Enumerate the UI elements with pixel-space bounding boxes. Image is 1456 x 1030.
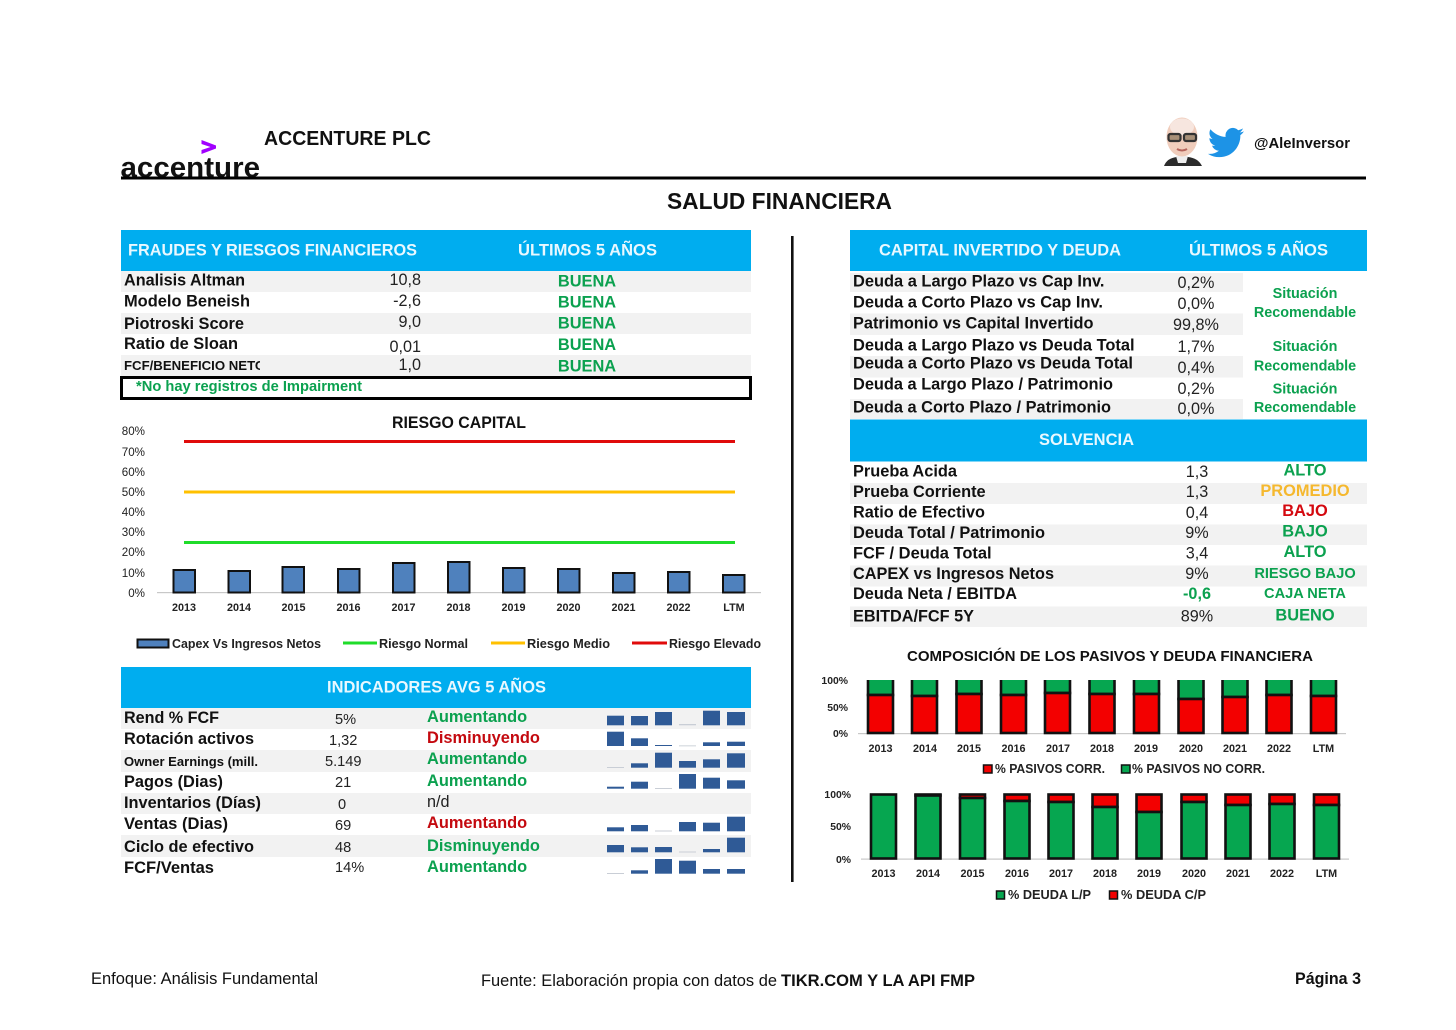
chart title: RIESGO CAPITAL xyxy=(392,413,526,432)
x axis: 2021 xyxy=(611,602,636,614)
legend: % PASIVOS CORR. xyxy=(995,761,1105,776)
x axis: 2022 xyxy=(666,602,691,614)
legend xyxy=(996,887,1206,902)
y axis xyxy=(122,425,145,600)
panel: solvencia: FCF / Deuda Total xyxy=(853,544,992,562)
panel: capital invertido y deuda: Deuda a Corto Plazo vs Cap Inv. xyxy=(853,294,1103,312)
panel: indicadores avg 5 anos: 1,32 xyxy=(329,733,357,749)
panel: capital invertido y deuda: Recomendable xyxy=(1254,358,1356,374)
panel: capital invertido y deuda: Patrimonio vs Capital Invertido xyxy=(853,314,1094,332)
panel: solvencia: Deuda Neta / EBITDA xyxy=(853,585,1017,603)
logo: accenture: accenture xyxy=(120,152,260,184)
y axis: 30% xyxy=(122,526,145,539)
panel: fraudes y riesgos financieros: BUENA xyxy=(558,358,616,376)
panel: capital invertido y deuda: 0,0% xyxy=(1178,295,1214,313)
callout: impairment xyxy=(122,378,750,398)
panel: solvencia: BUENO xyxy=(1275,606,1335,624)
panel: indicadores avg 5 anos: 5% xyxy=(335,712,356,728)
x axis: 2013 xyxy=(868,743,893,755)
panel: solvencia: RIESGO BAJO xyxy=(1254,566,1356,582)
icon: twitter bird xyxy=(1208,128,1244,157)
panel: indicadores avg 5 anos xyxy=(121,667,751,877)
y axis: 50% xyxy=(827,703,848,714)
x axis: 2017 xyxy=(1049,868,1073,880)
y axis: 0% xyxy=(128,587,145,600)
panel: solvencia: Prueba Acida xyxy=(853,462,958,480)
panel: indicadores avg 5 anos: 21 xyxy=(335,775,351,791)
x axis: 2019 xyxy=(501,602,526,614)
x axis: 2020 xyxy=(556,602,581,614)
panel: fraudes y riesgos financieros: 0,01 xyxy=(389,338,421,356)
x axis: 2013 xyxy=(871,868,896,880)
x axis: LTM xyxy=(1316,868,1337,880)
panel: indicadores avg 5 anos: Ciclo de efectivo xyxy=(124,838,254,856)
panel: capital invertido y deuda: 0,4% xyxy=(1178,359,1214,377)
x axis: 2022 xyxy=(1267,743,1291,755)
panel: solvencia: BAJO xyxy=(1282,522,1328,540)
panel: solvencia: 89% xyxy=(1181,608,1213,626)
y axis: 50% xyxy=(830,822,851,833)
x axis: 2013 xyxy=(172,602,196,614)
legend: Riesgo Medio xyxy=(527,636,610,651)
panel: indicadores avg 5 anos: 14% xyxy=(335,860,364,876)
x axis: 2015 xyxy=(960,868,985,880)
panel: capital invertido y deuda: Recomendable xyxy=(1254,400,1356,416)
y axis: 70% xyxy=(122,446,145,459)
panel: indicadores avg 5 anos: 48 xyxy=(335,840,351,856)
footer: pagina: Página 3 xyxy=(1295,970,1361,988)
company name: ACCENTURE PLC xyxy=(264,128,431,150)
heading: composicion de los pasivos: COMPOSICIÓN DE LOS PASIVOS Y DEUDA FINANCIERA xyxy=(907,647,1313,665)
panel: capital invertido y deuda: 99,8% xyxy=(1173,316,1219,334)
panel: indicadores avg 5 anos: Aumentando xyxy=(427,772,527,790)
footer xyxy=(91,970,1361,990)
panel: fraudes y riesgos financieros: BUENA xyxy=(558,314,616,332)
panel: indicadores avg 5 anos: Rotación activos xyxy=(124,730,254,748)
x axis: 2017 xyxy=(391,602,416,614)
panel: capital invertido y deuda: Deuda a Largo Plazo / Patrimonio xyxy=(853,376,1113,394)
panel: capital invertido y deuda: Recomendable xyxy=(1254,305,1356,321)
panel: solvencia: 9% xyxy=(1185,524,1209,542)
legend: % DEUDA C/P xyxy=(1121,887,1206,902)
x axis: 2018 xyxy=(446,602,471,614)
x axis: 2017 xyxy=(1046,743,1070,755)
panel: fraudes y riesgos financieros: BUENA xyxy=(558,336,616,354)
y axis xyxy=(821,676,848,740)
x axis: 2018 xyxy=(1093,868,1117,880)
x axis: 2014 xyxy=(913,743,937,755)
panel: indicadores avg 5 anos: Rend % FCF xyxy=(124,709,219,727)
y axis: 80% xyxy=(122,425,145,438)
legend xyxy=(984,761,1265,776)
panel: indicadores avg 5 anos: Owner Earnings (mill. xyxy=(124,754,258,769)
panel: solvencia: 1,3 xyxy=(1186,483,1208,501)
heading: fraudes: FRAUDES Y RIESGOS FINANCIEROS xyxy=(128,240,417,260)
x axis: 2015 xyxy=(281,602,306,614)
x axis xyxy=(172,602,745,614)
x axis: 2016 xyxy=(1005,868,1029,880)
callout: impairment: *No hay registros de Impairment xyxy=(136,379,362,395)
panel: indicadores avg 5 anos: Aumentando xyxy=(427,858,527,876)
panel: indicadores avg 5 anos: Aumentando xyxy=(427,708,527,726)
heading: capital invertido: CAPITAL INVERTIDO Y DEUDA xyxy=(879,240,1121,260)
panel: indicadores avg 5 anos: Disminuyendo xyxy=(427,729,540,747)
panel: indicadores avg 5 anos: 5.149 xyxy=(325,754,362,770)
twitter handle: @AleInversor xyxy=(1254,135,1350,152)
x axis: 2015 xyxy=(957,743,981,755)
x axis xyxy=(868,743,1334,755)
panel: solvencia: ALTO xyxy=(1283,543,1327,561)
heading: ultimos 5 anos: ÚLTIMOS 5 AÑOS xyxy=(1189,240,1328,260)
panel: capital invertido y deuda: Deuda a Corto Plazo vs Deuda Total xyxy=(853,354,1133,372)
panel: solvencia: Prueba Corriente xyxy=(853,483,986,501)
y axis: 50% xyxy=(122,486,145,499)
panel: fraudes y riesgos financieros: Modelo Beneish xyxy=(124,292,250,310)
panel: capital invertido y deuda: Situación xyxy=(1273,382,1337,398)
panel: solvencia: CAPEX vs Ingresos Netos xyxy=(853,565,1054,583)
panel: fraudes y riesgos financieros: Analisis Altman xyxy=(124,272,245,290)
stacked bars xyxy=(860,674,1346,733)
panel: solvencia: ALTO xyxy=(1283,462,1327,480)
y axis: 100% xyxy=(824,790,851,801)
panel: indicadores avg 5 anos: Ventas (Dias) xyxy=(124,815,228,833)
panel: indicadores avg 5 anos: 69 xyxy=(335,818,351,834)
panel: solvencia xyxy=(850,420,1367,627)
icon: avatar xyxy=(1164,118,1202,166)
x axis: 2021 xyxy=(1223,743,1247,755)
panel: capital invertido y deuda: Situación xyxy=(1273,286,1337,302)
panel: solvencia: Deuda Total / Patrimonio xyxy=(853,524,1045,542)
panel: capital invertido y deuda: 0,2% xyxy=(1178,380,1214,398)
heading: ultimos 5 anos: ÚLTIMOS 5 AÑOS xyxy=(518,240,657,260)
x axis: LTM xyxy=(1313,743,1334,755)
x axis: 2016 xyxy=(1001,743,1026,755)
footer: fuente: TIKR.COM Y LA API FMP xyxy=(781,972,975,990)
panel: indicadores avg 5 anos: FCF/Ventas xyxy=(124,859,214,877)
panel: indicadores avg 5 anos: 0 xyxy=(338,797,346,813)
heading: solvencia: SOLVENCIA xyxy=(1039,430,1134,449)
panel: capital invertido y deuda: 1,7% xyxy=(1178,338,1214,356)
panel: solvencia: 1,3 xyxy=(1186,463,1208,481)
panel: indicadores avg 5 anos: Pagos (Dias) xyxy=(124,773,223,791)
panel: fraudes y riesgos financieros: 1,0 xyxy=(398,356,421,374)
x axis: 2014 xyxy=(227,602,251,614)
stacked bars xyxy=(871,794,1339,858)
y axis: 10% xyxy=(122,567,145,580)
panel: indicadores avg 5 anos: Aumentando xyxy=(427,814,527,832)
y axis: 0% xyxy=(833,729,848,740)
panel: fraudes y riesgos financieros: 10,8 xyxy=(389,271,421,289)
panel: capital invertido y deuda: 0,2% xyxy=(1178,274,1214,292)
legend xyxy=(138,636,761,651)
x axis: 2022 xyxy=(1270,868,1294,880)
panel: solvencia: Ratio de Efectivo xyxy=(853,504,985,522)
y axis: 60% xyxy=(122,466,145,479)
panel: fraudes y riesgos financieros: BUENA xyxy=(558,294,616,312)
panel: capital invertido y deuda xyxy=(850,230,1367,419)
panel: solvencia: 3,4 xyxy=(1186,544,1208,562)
panel: fraudes y riesgos financieros: 9,0 xyxy=(398,313,421,331)
x axis: 2019 xyxy=(1134,743,1158,755)
risk lines xyxy=(184,440,735,544)
y axis: 20% xyxy=(122,546,145,559)
panel: indicadores avg 5 anos: Inventarios (Días) xyxy=(124,794,261,812)
panel: solvencia: CAJA NETA xyxy=(1264,586,1346,602)
chart: composicion deuda xyxy=(824,790,1349,902)
y axis: 100% xyxy=(821,676,848,687)
sparkline bars xyxy=(607,711,745,874)
panel: capital invertido y deuda: Situación xyxy=(1273,339,1337,355)
x axis: LTM xyxy=(723,602,745,614)
panel: fraudes y riesgos financieros xyxy=(121,230,751,398)
panel: indicadores avg 5 anos: n/d xyxy=(427,793,450,811)
legend: Capex Vs Ingresos Netos xyxy=(172,636,321,651)
main title: SALUD FINANCIERA xyxy=(667,188,892,214)
y axis: 40% xyxy=(122,506,145,519)
capex bars xyxy=(174,562,744,592)
panel: solvencia: PROMEDIO xyxy=(1260,482,1350,500)
y axis xyxy=(824,790,851,866)
panel: indicadores avg 5 anos: Disminuyendo xyxy=(427,837,540,855)
panel: solvencia: 0,4 xyxy=(1186,504,1208,522)
legend: Riesgo Elevado xyxy=(669,636,761,651)
x axis xyxy=(871,868,1337,880)
x axis: 2020 xyxy=(1182,868,1206,880)
x axis: 2018 xyxy=(1090,743,1114,755)
panel: solvencia: -0,6 xyxy=(1183,585,1211,603)
x axis: 2016 xyxy=(336,602,361,614)
legend: % PASIVOS NO CORR. xyxy=(1132,761,1265,776)
footer: fuente xyxy=(481,972,975,990)
panel: fraudes y riesgos financieros: BUENA xyxy=(558,272,616,290)
panel: solvencia: 9% xyxy=(1185,565,1209,583)
x axis: 2021 xyxy=(1226,868,1250,880)
panel: indicadores avg 5 anos: Aumentando xyxy=(427,750,527,768)
heading: indicadores: INDICADORES AVG 5 AÑOS xyxy=(327,676,546,696)
x axis: 2020 xyxy=(1179,743,1203,755)
panel: capital invertido y deuda: 0,0% xyxy=(1178,400,1214,418)
panel: fraudes y riesgos financieros: -2,6 xyxy=(393,292,421,310)
panel: solvencia: EBITDA/FCF 5Y xyxy=(853,608,974,626)
panel: fraudes y riesgos financieros: FCF/BENEFICIO NETO xyxy=(124,358,265,373)
panel: fraudes y riesgos financieros: Piotroski Score xyxy=(124,315,244,333)
legend: % DEUDA L/P xyxy=(1008,887,1091,902)
panel: capital invertido y deuda: Deuda a Largo Plazo vs Cap Inv. xyxy=(853,272,1104,290)
y axis: 0% xyxy=(836,855,851,866)
chart: riesgo capital xyxy=(122,413,761,651)
legend: Riesgo Normal xyxy=(379,636,468,651)
header band xyxy=(120,118,1366,184)
panel: solvencia: BAJO xyxy=(1282,502,1328,520)
x axis: 2019 xyxy=(1137,868,1161,880)
footer: fuente: Fuente: Elaboración propia con datos de xyxy=(481,972,777,990)
chart: composicion pasivos xyxy=(821,674,1346,776)
x axis: 2014 xyxy=(916,868,940,880)
panel: capital invertido y deuda: Deuda a Corto Plazo / Patrimonio xyxy=(853,398,1111,416)
footer: enfoque: Enfoque: Análisis Fundamental xyxy=(91,970,318,988)
panel: capital invertido y deuda: Deuda a Largo Plazo vs Deuda Total xyxy=(853,336,1135,354)
panel: fraudes y riesgos financieros: Ratio de Sloan xyxy=(124,335,238,353)
